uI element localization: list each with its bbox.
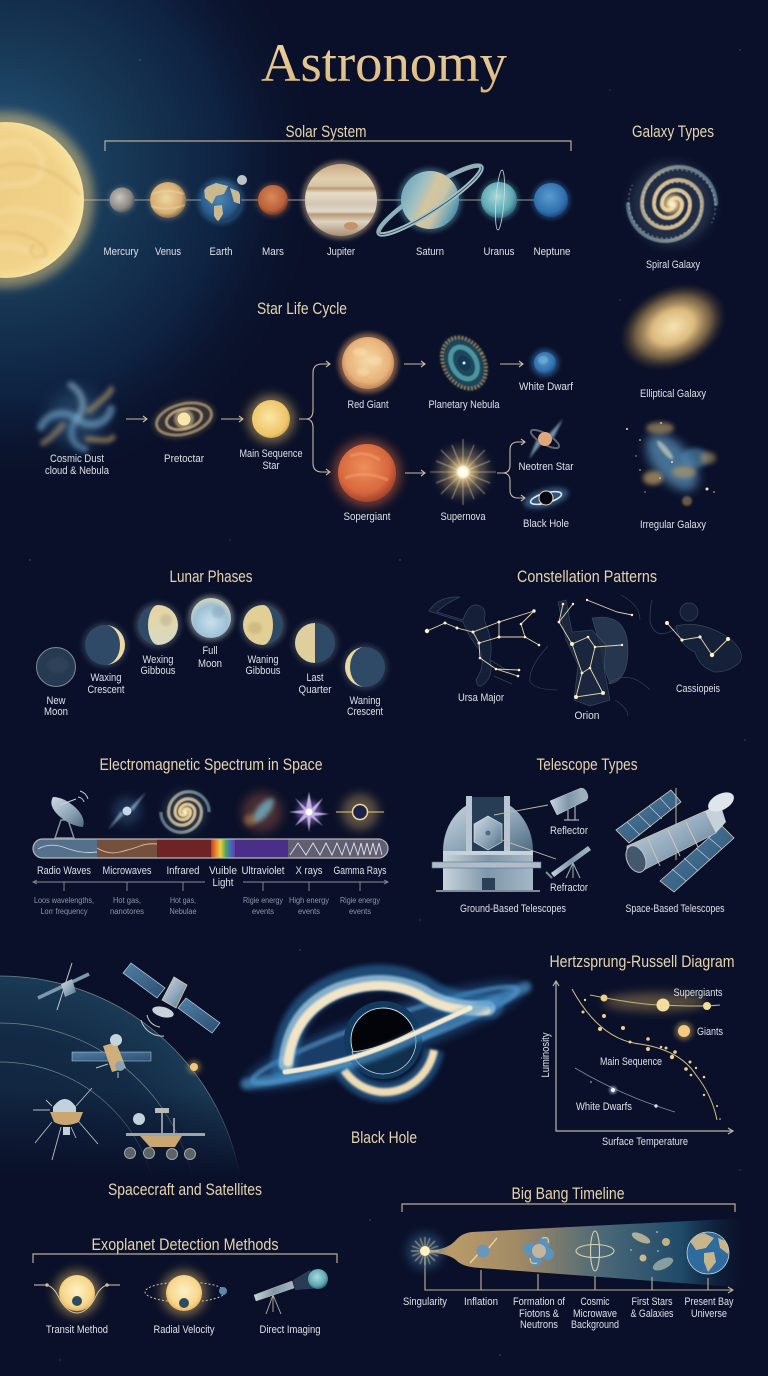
moon: waning gibbous <box>240 602 286 648</box>
planet: Uranus <box>479 170 519 230</box>
title: Astronomy <box>261 33 507 93</box>
main sequence star <box>247 395 295 443</box>
spectrum labels: Radio Waves <box>37 865 91 877</box>
label: waxing crescent: Crescent <box>88 684 124 696</box>
spectrum notes: Lorr frequency <box>40 907 88 916</box>
direct imaging icon <box>254 1269 328 1314</box>
label: spiral galaxy: Spiral Galaxy <box>646 259 700 271</box>
icon: x-ray burst <box>289 792 329 832</box>
label: planetary nebula: Planetary Nebula <box>428 399 500 411</box>
spectrum notes: events <box>349 907 371 916</box>
label: waning crescent <box>347 695 383 718</box>
label: waxing gibbous: Wexing <box>142 654 174 666</box>
constellation labels: Cassiopeis <box>676 683 720 695</box>
spectrum labels: Infrared <box>166 865 200 877</box>
irregular galaxy <box>626 422 716 506</box>
singularity <box>407 1233 443 1269</box>
moon: last quarter <box>292 620 338 666</box>
label: cosmic dust: cloud & Nebula <box>45 465 110 477</box>
constellation: Cassiopeia <box>665 621 730 657</box>
heading: big bang timeline: Big Bang Timeline <box>512 1185 624 1203</box>
label: waning gibbous <box>246 654 281 677</box>
panel: black hole <box>237 964 533 1147</box>
heading: star life cycle: Star Life Cycle <box>257 300 347 318</box>
label: reflector: Reflector <box>550 825 588 837</box>
label: red giant: Red Giant <box>348 399 388 411</box>
label: main sequence star <box>240 448 302 472</box>
panel: lunar phases <box>36 568 388 718</box>
life cycle arrows <box>126 361 525 501</box>
label: full moon <box>198 645 222 670</box>
spectrum notes: Hot gas, <box>170 896 196 905</box>
heading: constellation patterns: Constellation Patterns <box>517 568 657 586</box>
hr labels: White Dwarfs <box>576 1101 632 1113</box>
timeline labels: Neutrons <box>520 1319 558 1331</box>
label: main sequence star: Star <box>262 460 280 472</box>
planet labels <box>104 246 570 258</box>
moon <box>237 175 247 185</box>
neutron star <box>529 419 563 459</box>
label: cosmic dust <box>45 453 110 477</box>
icon: nebula <box>242 792 282 832</box>
label: waning crescent: Crescent <box>347 706 383 718</box>
label: neutron star: Neotren Star <box>518 461 574 473</box>
label: cosmic dust: Cosmic Dust <box>50 453 104 465</box>
label: new moon <box>44 695 68 718</box>
planet labels: Earth <box>210 246 232 258</box>
planet labels: Jupiter <box>327 246 355 258</box>
space telescope <box>616 788 737 892</box>
label: full moon: Moon <box>198 658 222 670</box>
constellation labels: Ursa Major <box>458 692 504 704</box>
spectrum notes: Rigie energy <box>243 896 283 905</box>
hr labels: Main Sequence <box>600 1056 662 1068</box>
elliptical galaxy <box>605 266 741 388</box>
panel: exoplanet detection methods <box>33 1236 337 1336</box>
moon: new <box>36 648 76 686</box>
planetary nebula <box>433 329 495 397</box>
hr labels <box>540 987 723 1148</box>
timeline labels: First Stars <box>632 1296 673 1308</box>
timeline labels: Background <box>571 1319 619 1331</box>
constellation labels <box>458 683 720 722</box>
label: new moon: Moon <box>44 706 68 718</box>
timeline labels: Cosmic <box>580 1296 610 1308</box>
label: new moon: New <box>46 695 66 707</box>
label: white dwarf: White Dwarf <box>519 381 574 393</box>
moon: waning crescent <box>342 644 388 690</box>
spectrum labels: X rays <box>296 865 323 877</box>
timeline labels: Present Bay <box>684 1296 734 1308</box>
label: waxing crescent: Waxing <box>90 672 122 684</box>
planet labels: Mars <box>262 246 284 258</box>
timeline labels: Inflation <box>464 1296 498 1308</box>
cosmic dust nebula <box>41 385 113 449</box>
label: protostar: Pretoctar <box>164 453 204 465</box>
label: transit method: Transit Method <box>46 1324 108 1336</box>
heading: electromagnetic spectrum: Electromagnetic Spectrum in Space <box>100 756 322 774</box>
main sequence stars <box>582 999 721 1120</box>
planet: Mars <box>256 183 290 217</box>
spectrum notes: events <box>298 907 320 916</box>
white dwarf <box>531 349 559 377</box>
timeline labels: Fiotons & <box>519 1308 560 1320</box>
satellite 1 <box>38 963 89 1010</box>
moon: waxing gibbous <box>135 602 181 648</box>
rover <box>124 1108 205 1160</box>
planet labels: Mercury <box>104 246 139 258</box>
figure: Orion outline <box>530 595 650 716</box>
panel: big bang timeline <box>402 1185 748 1331</box>
spectrum notes: High energy <box>289 896 329 905</box>
spectrum notes: Nebulae <box>170 907 197 916</box>
heading: exoplanet detection: Exoplanet Detection Methods <box>92 1236 278 1254</box>
inflation icon <box>470 1238 497 1263</box>
cmb icon <box>576 1231 614 1271</box>
supernova <box>430 439 496 505</box>
radial velocity icon <box>145 1270 227 1316</box>
icon: pulsar <box>108 792 146 830</box>
figure: Ursa Major outline <box>429 597 512 686</box>
spectrum labels: Vuible <box>209 865 237 877</box>
spectrum notes: Rigie energy <box>340 896 380 905</box>
sun marker <box>187 1060 201 1074</box>
heading: hr diagram: Hertzsprung-Russell Diagram <box>550 953 734 971</box>
hr labels: Supergiants <box>674 987 723 999</box>
heading: solar system: Solar System <box>286 123 366 141</box>
label: waxing gibbous <box>140 654 176 677</box>
hr labels: Surface Temperature <box>602 1136 688 1148</box>
planet labels: Saturn <box>416 246 444 258</box>
heading: spacecraft and satellites: Spacecraft and Satellites <box>108 1181 262 1199</box>
icon: radio dish <box>51 791 88 838</box>
giant star <box>675 1022 693 1040</box>
expansion cone <box>430 1218 748 1288</box>
icon: gamma ray <box>336 794 384 830</box>
label: waning gibbous: Waning <box>248 654 278 666</box>
label: black hole small: Black Hole <box>523 518 569 530</box>
panel: spacecraft and satellites <box>0 963 262 1220</box>
spectrum notes: events <box>252 907 274 916</box>
label: last quarter <box>298 672 332 696</box>
timeline labels: Universe <box>691 1308 727 1320</box>
timeline labels: & Galaxies <box>630 1308 674 1320</box>
label: irregular galaxy: Irregular Galaxy <box>640 519 706 531</box>
spectrum notes: nanotores <box>110 907 144 916</box>
moon: waxing crescent <box>82 622 128 668</box>
label: waning gibbous: Gibbous <box>246 665 281 677</box>
bracket <box>402 1204 735 1212</box>
black hole small <box>521 483 571 513</box>
planet: Venus <box>148 180 188 220</box>
spectrum bar <box>33 839 388 858</box>
red giant <box>338 333 398 393</box>
label: waxing gibbous: Gibbous <box>140 665 176 677</box>
orbit disc and lines <box>0 976 239 1171</box>
protostar <box>148 393 220 445</box>
spiral galaxy <box>616 158 728 250</box>
spectrum labels: Light <box>212 877 234 889</box>
axes <box>553 981 733 1134</box>
hr labels: Giants <box>697 1026 723 1038</box>
spectrum labels: Gamma Rays <box>334 865 387 877</box>
planet: Saturn <box>361 140 499 260</box>
satellite 3 <box>72 1034 151 1078</box>
moon: full <box>188 595 234 641</box>
outer disc glow <box>237 964 533 1106</box>
planet labels: Venus <box>155 246 181 258</box>
label: last quarter: Quarter <box>298 684 332 696</box>
label: supergiant: Sopergiant <box>344 511 390 523</box>
front disc band <box>246 987 526 1084</box>
main sequence curve <box>572 989 717 1120</box>
orbit line <box>84 199 535 201</box>
label: direct imaging: Direct Imaging <box>260 1324 320 1336</box>
label: refractor: Refractor <box>550 882 588 894</box>
label: supernova: Supernova <box>440 511 486 523</box>
panel: electromagnetic spectrum <box>33 756 388 916</box>
planet: Jupiter <box>302 161 380 239</box>
timeline labels: Singularity <box>403 1296 447 1308</box>
white dwarf sequence <box>575 1068 675 1112</box>
bracket <box>33 1254 337 1263</box>
heading: galaxy types: Galaxy Types <box>632 123 714 141</box>
supergiant <box>333 439 401 507</box>
planet labels: Neptune <box>534 246 570 258</box>
spectrum labels: Microwaves <box>102 865 152 877</box>
heading: telescope types: Telescope Types <box>536 756 638 774</box>
supergiant band <box>590 993 720 1012</box>
spectrum notes: Loos wavelengths, <box>34 896 94 905</box>
sun <box>0 112 94 288</box>
bracket <box>105 141 571 151</box>
constellation labels: Orion <box>574 710 600 722</box>
panel: solar system <box>0 112 571 288</box>
observatory dome <box>432 796 556 892</box>
transit method icon <box>34 1270 120 1316</box>
constellation: Orion <box>558 599 633 699</box>
timeline axis <box>425 1252 733 1293</box>
label: black hole: Black Hole <box>351 1129 417 1147</box>
lensed lower arc <box>344 1050 434 1092</box>
icon: spiral galaxy spectrum <box>161 792 209 832</box>
label: ground-based: Ground-Based Telescopes <box>460 903 566 915</box>
refractor telescope <box>546 846 591 878</box>
lensed upper arc <box>284 977 490 1066</box>
satellite 2 <box>123 963 220 1036</box>
event horizon <box>344 1001 422 1079</box>
hr labels: Luminosity <box>540 1032 552 1078</box>
label: main sequence star: Main Sequence <box>240 448 302 460</box>
first stars icon <box>630 1230 675 1273</box>
label: waning crescent: Waning <box>350 695 380 707</box>
spectrum labels <box>37 865 387 889</box>
panel: star life cycle <box>41 300 574 530</box>
spectrum notes <box>34 896 380 916</box>
present-day earth <box>687 1232 730 1274</box>
label: last quarter: Last <box>306 672 324 684</box>
heading: lunar phases: Lunar Phases <box>170 568 252 586</box>
planet labels: Uranus <box>484 246 515 258</box>
spectrum labels: Ultraviolet <box>242 865 284 877</box>
constellation: Ursa Major <box>425 609 540 677</box>
timeline labels: Formation of <box>513 1296 566 1308</box>
planet: Mercury <box>108 186 136 214</box>
label: space-based: Space-Based Telescopes <box>626 903 725 915</box>
lander <box>33 1088 98 1160</box>
panel: hertzsprung-russell diagram <box>540 953 734 1148</box>
figure: Cassiopeia outline <box>650 600 741 672</box>
timeline labels <box>403 1296 734 1331</box>
label: radial velocity: Radial Velocity <box>154 1324 215 1336</box>
panel: constellation patterns <box>425 568 741 722</box>
spectrum notes: Hot gas, <box>113 896 141 905</box>
label: elliptical galaxy: Elliptical Galaxy <box>640 388 706 400</box>
label: full moon: Full <box>202 645 218 657</box>
label: waxing crescent <box>88 672 124 696</box>
atom icon <box>524 1237 554 1266</box>
planet: Earth <box>198 178 244 224</box>
reflector telescope <box>550 787 590 820</box>
timeline labels: Microwave <box>573 1308 617 1320</box>
planet: Neptune <box>532 181 570 219</box>
wavelength axis <box>33 880 388 891</box>
panel: galaxy types <box>605 123 741 531</box>
panel: telescope types <box>432 756 737 915</box>
